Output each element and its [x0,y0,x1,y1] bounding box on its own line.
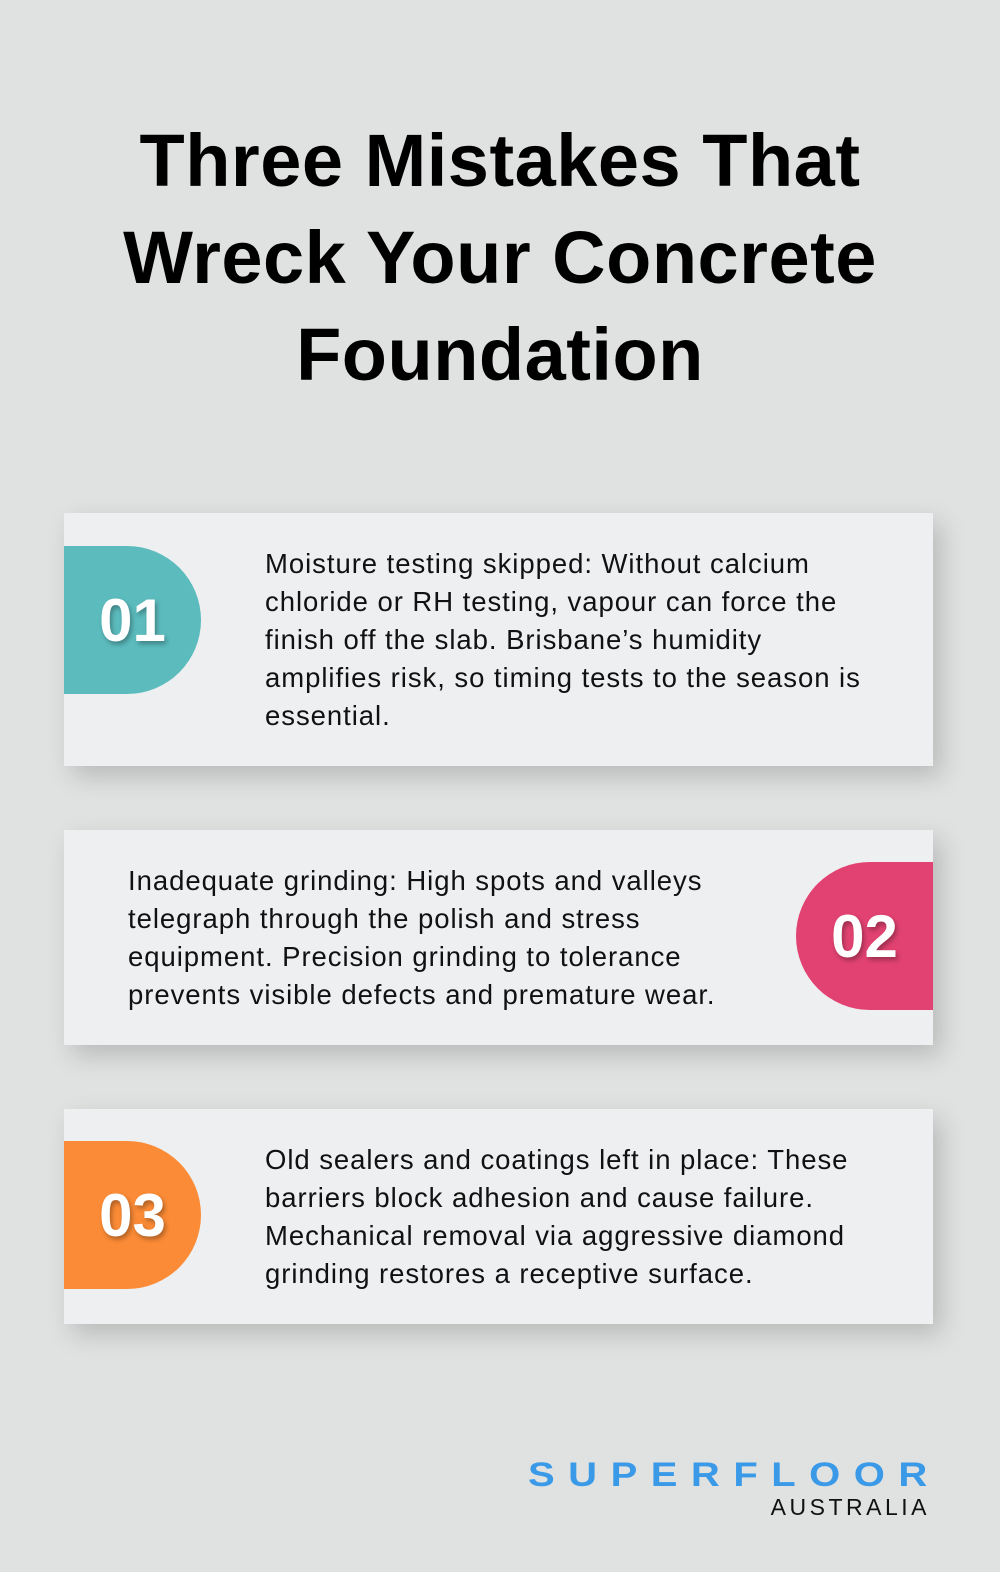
badge 02: 02 [831,902,898,970]
badge 02 [796,862,933,1010]
title: Wreck Your Concrete [123,216,877,299]
text 3: barriers block adhesion and cause failure. [265,1182,814,1213]
text 1: Moisture testing skipped: Without calcium [265,548,810,579]
text 1 [265,548,861,731]
logo: AUSTRALIA [771,1494,930,1520]
text 2: Inadequate grinding: High spots and valleys [128,865,702,896]
text 1: chloride or RH testing, vapour can force the [265,586,837,617]
panel: mistake 2 [64,830,933,1045]
title: Foundation [296,313,704,396]
text 1: amplifies risk, so timing tests to the season is [265,662,861,693]
text 3: grinding restores a receptive surface. [265,1258,754,1289]
logo: SUPERFLOOR [528,1456,941,1494]
badge 03: 03 [99,1182,166,1248]
text 2: equipment. Precision grinding to tolerance [128,941,682,972]
text 3: Mechanical removal via aggressive diamond [265,1220,845,1251]
badge 01: 01 [99,586,166,654]
text 1: essential. [265,700,391,731]
text 1: finish off the slab. Brisbane’s humidity [265,624,762,655]
text 3: Old sealers and coatings left in place: These [265,1144,848,1175]
title: Three Mistakes That [140,119,860,202]
panel: mistake 1 [64,513,933,766]
text 2: prevents visible defects and premature wear. [128,979,716,1010]
badge 03 [64,1141,201,1289]
panel: mistake 3 [64,1109,933,1324]
logo [528,1456,941,1520]
title [123,119,877,396]
text 3 [265,1144,848,1289]
badge 01 [64,546,201,694]
text 2 [128,865,716,1010]
text 2: telegraph through the polish and stress [128,903,640,934]
